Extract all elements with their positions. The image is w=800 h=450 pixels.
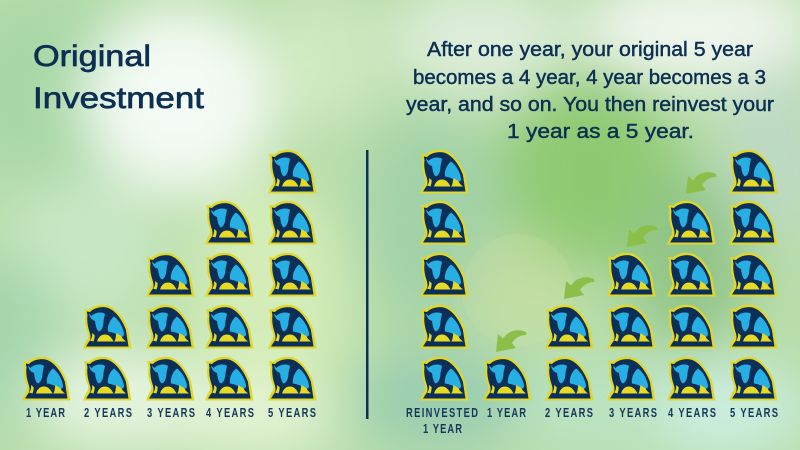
arrow: 3 year to 2 year (564, 277, 594, 299)
column: 4 years (667, 201, 716, 400)
column: 4 years (205, 201, 254, 400)
labels: original ladder: 1 YEAR (26, 407, 65, 420)
explanatory text (406, 39, 774, 143)
labels: original ladder (26, 407, 316, 420)
chart: original investment ladder (22, 150, 316, 400)
column: 2 years (545, 305, 594, 400)
heading: Original Investment: Investment (33, 82, 205, 115)
column: 2 years (83, 305, 132, 400)
column: 1 year (483, 357, 532, 400)
explanatory text: After one year, your original 5 year (427, 39, 753, 61)
chart: reinvested ladder (420, 150, 778, 400)
labels: reinvested ladder: 4 YEARS (668, 407, 716, 420)
explanatory text: 1 year as a 5 year. (507, 121, 694, 143)
column: 5 years (729, 150, 778, 400)
labels: original ladder: 2 YEARS (84, 407, 132, 420)
labels: original ladder: 5 YEARS (268, 407, 316, 420)
explanatory text: becomes a 4 year, 4 year becomes a 3 (413, 67, 766, 89)
labels: reinvested ladder: 3 YEARS (609, 407, 657, 420)
column: reinvested 1 year (420, 150, 468, 400)
column: 1 year (22, 357, 70, 400)
arrow: 4 year to 3 year (627, 225, 658, 247)
arrow: 5 year to 4 year (686, 172, 716, 194)
arrows: shift down one rung (496, 172, 716, 352)
labels: reinvested ladder (406, 407, 778, 436)
labels: reinvested ladder: 1 YEAR (487, 407, 526, 420)
column: 5 years (268, 150, 316, 400)
labels: original ladder: 3 YEARS (147, 407, 195, 420)
labels: reinvested ladder: 5 YEARS (730, 407, 778, 420)
heading: Original Investment (33, 40, 205, 115)
labels: reinvested ladder: REINVESTED (406, 407, 478, 420)
labels: original ladder: 4 YEARS (206, 407, 254, 420)
column: 3 years (146, 253, 194, 400)
heading: Original Investment: Original (33, 40, 151, 73)
labels: reinvested ladder: 2 YEARS (545, 407, 593, 420)
arrow: 2 year to 1 year (496, 330, 526, 352)
column: 3 years (607, 253, 656, 400)
divider line (366, 150, 368, 419)
labels: reinvested ladder: 1 YEAR (423, 423, 462, 436)
explanatory text: year, and so on. You then reinvest your (406, 94, 774, 116)
